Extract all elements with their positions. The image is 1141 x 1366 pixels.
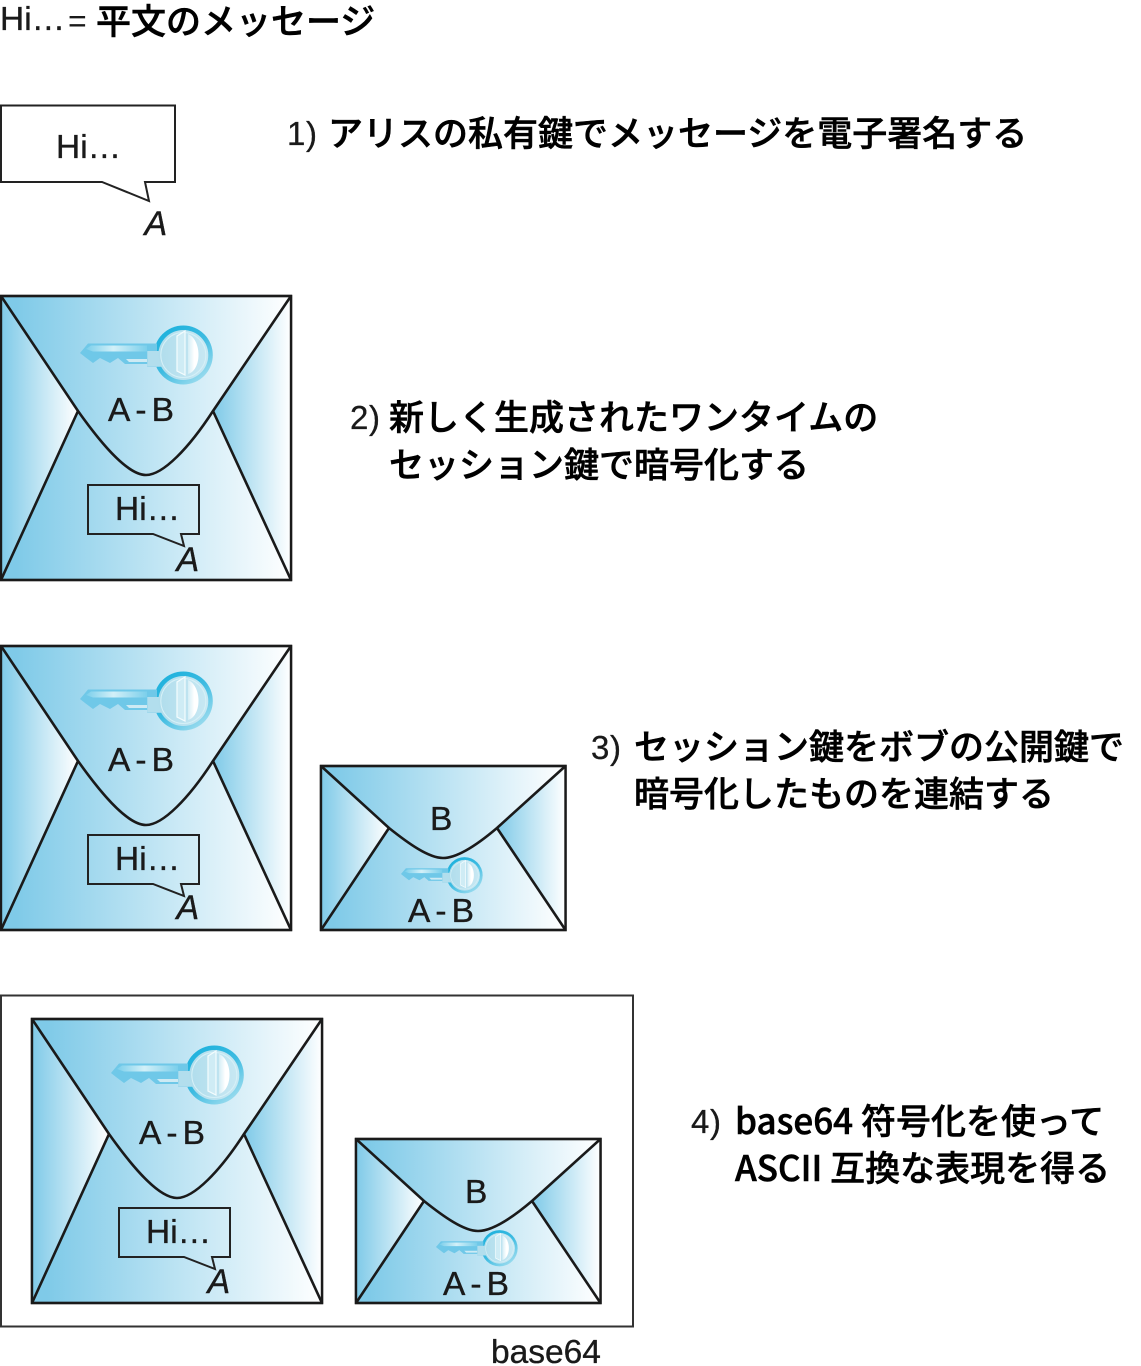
heading: plaintext legend: Hi… — [0, 1, 65, 38]
step 3 text: 暗号化したものを連結する — [634, 766, 1054, 818]
step 3 text: 3) — [591, 729, 622, 766]
icon: key — [401, 857, 483, 893]
envelope: encrypted message with session key, step 3: A-B — [108, 742, 174, 779]
speech bubble: A — [206, 1263, 230, 1301]
icon: key — [80, 672, 213, 730]
step 2 text: 2) — [350, 399, 381, 436]
speech bubble — [88, 835, 199, 927]
envelope: encrypted message inside base64: A-B — [139, 1115, 205, 1152]
envelope: encrypted message with session key, step 2: A-B — [108, 392, 174, 429]
speech bubble: Hi… — [146, 1214, 211, 1251]
step 4 text: ASCII 互換な表現を得る — [735, 1141, 1110, 1192]
envelope: session key encrypted with Bob's public key, step 3: A-B — [408, 893, 474, 930]
heading: plaintext legend: = — [68, 3, 87, 39]
icon: key — [111, 1046, 244, 1104]
icon: key — [80, 326, 213, 384]
speech bubble: A — [174, 889, 199, 927]
envelope: encrypted session key inside base64 — [356, 1139, 600, 1303]
panel: base64 wrapper — [1, 996, 633, 1326]
step 4 text: base64 符号化を使って — [735, 1094, 1104, 1145]
speech bubble — [88, 485, 199, 579]
step 1 text: 1) — [287, 115, 318, 152]
envelope: encrypted message inside base64 — [32, 1019, 322, 1303]
step 2 text: セッション鍵で暗号化する — [389, 438, 809, 488]
envelope: session key encrypted with Bob's public key, step 3 — [321, 766, 566, 930]
step 4 text: 4) — [691, 1103, 722, 1140]
icon: key — [436, 1230, 518, 1266]
speech bubble: A — [174, 541, 199, 579]
envelope: encrypted message with session key, step 3 — [1, 646, 291, 930]
step 1 text: アリスの私有鍵でメッセージを電子署名する — [328, 106, 1027, 157]
speech bubble: plaintext signed by A — [1, 106, 175, 243]
step 3 text: セッション鍵をボブの公開鍵で — [634, 720, 1124, 770]
step 2 text: 新しく生成されたワンタイムの — [389, 390, 878, 441]
step 2 text — [350, 390, 878, 488]
step 4 text — [691, 1094, 1110, 1192]
speech bubble — [119, 1208, 230, 1301]
speech bubble: Hi… — [115, 841, 180, 878]
envelope: encrypted message with session key, step 2 — [1, 296, 291, 580]
speech bubble: Hi… — [115, 491, 180, 528]
envelope: encrypted session key inside base64: A-B — [443, 1266, 509, 1303]
envelope: session key encrypted with Bob's public key, step 3: B — [430, 801, 452, 838]
speech bubble: plaintext signed by A: A — [142, 205, 167, 243]
speech bubble: plaintext signed by A: Hi… — [56, 129, 121, 166]
envelope: encrypted session key inside base64: B — [465, 1174, 487, 1211]
step 3 text — [591, 720, 1124, 818]
